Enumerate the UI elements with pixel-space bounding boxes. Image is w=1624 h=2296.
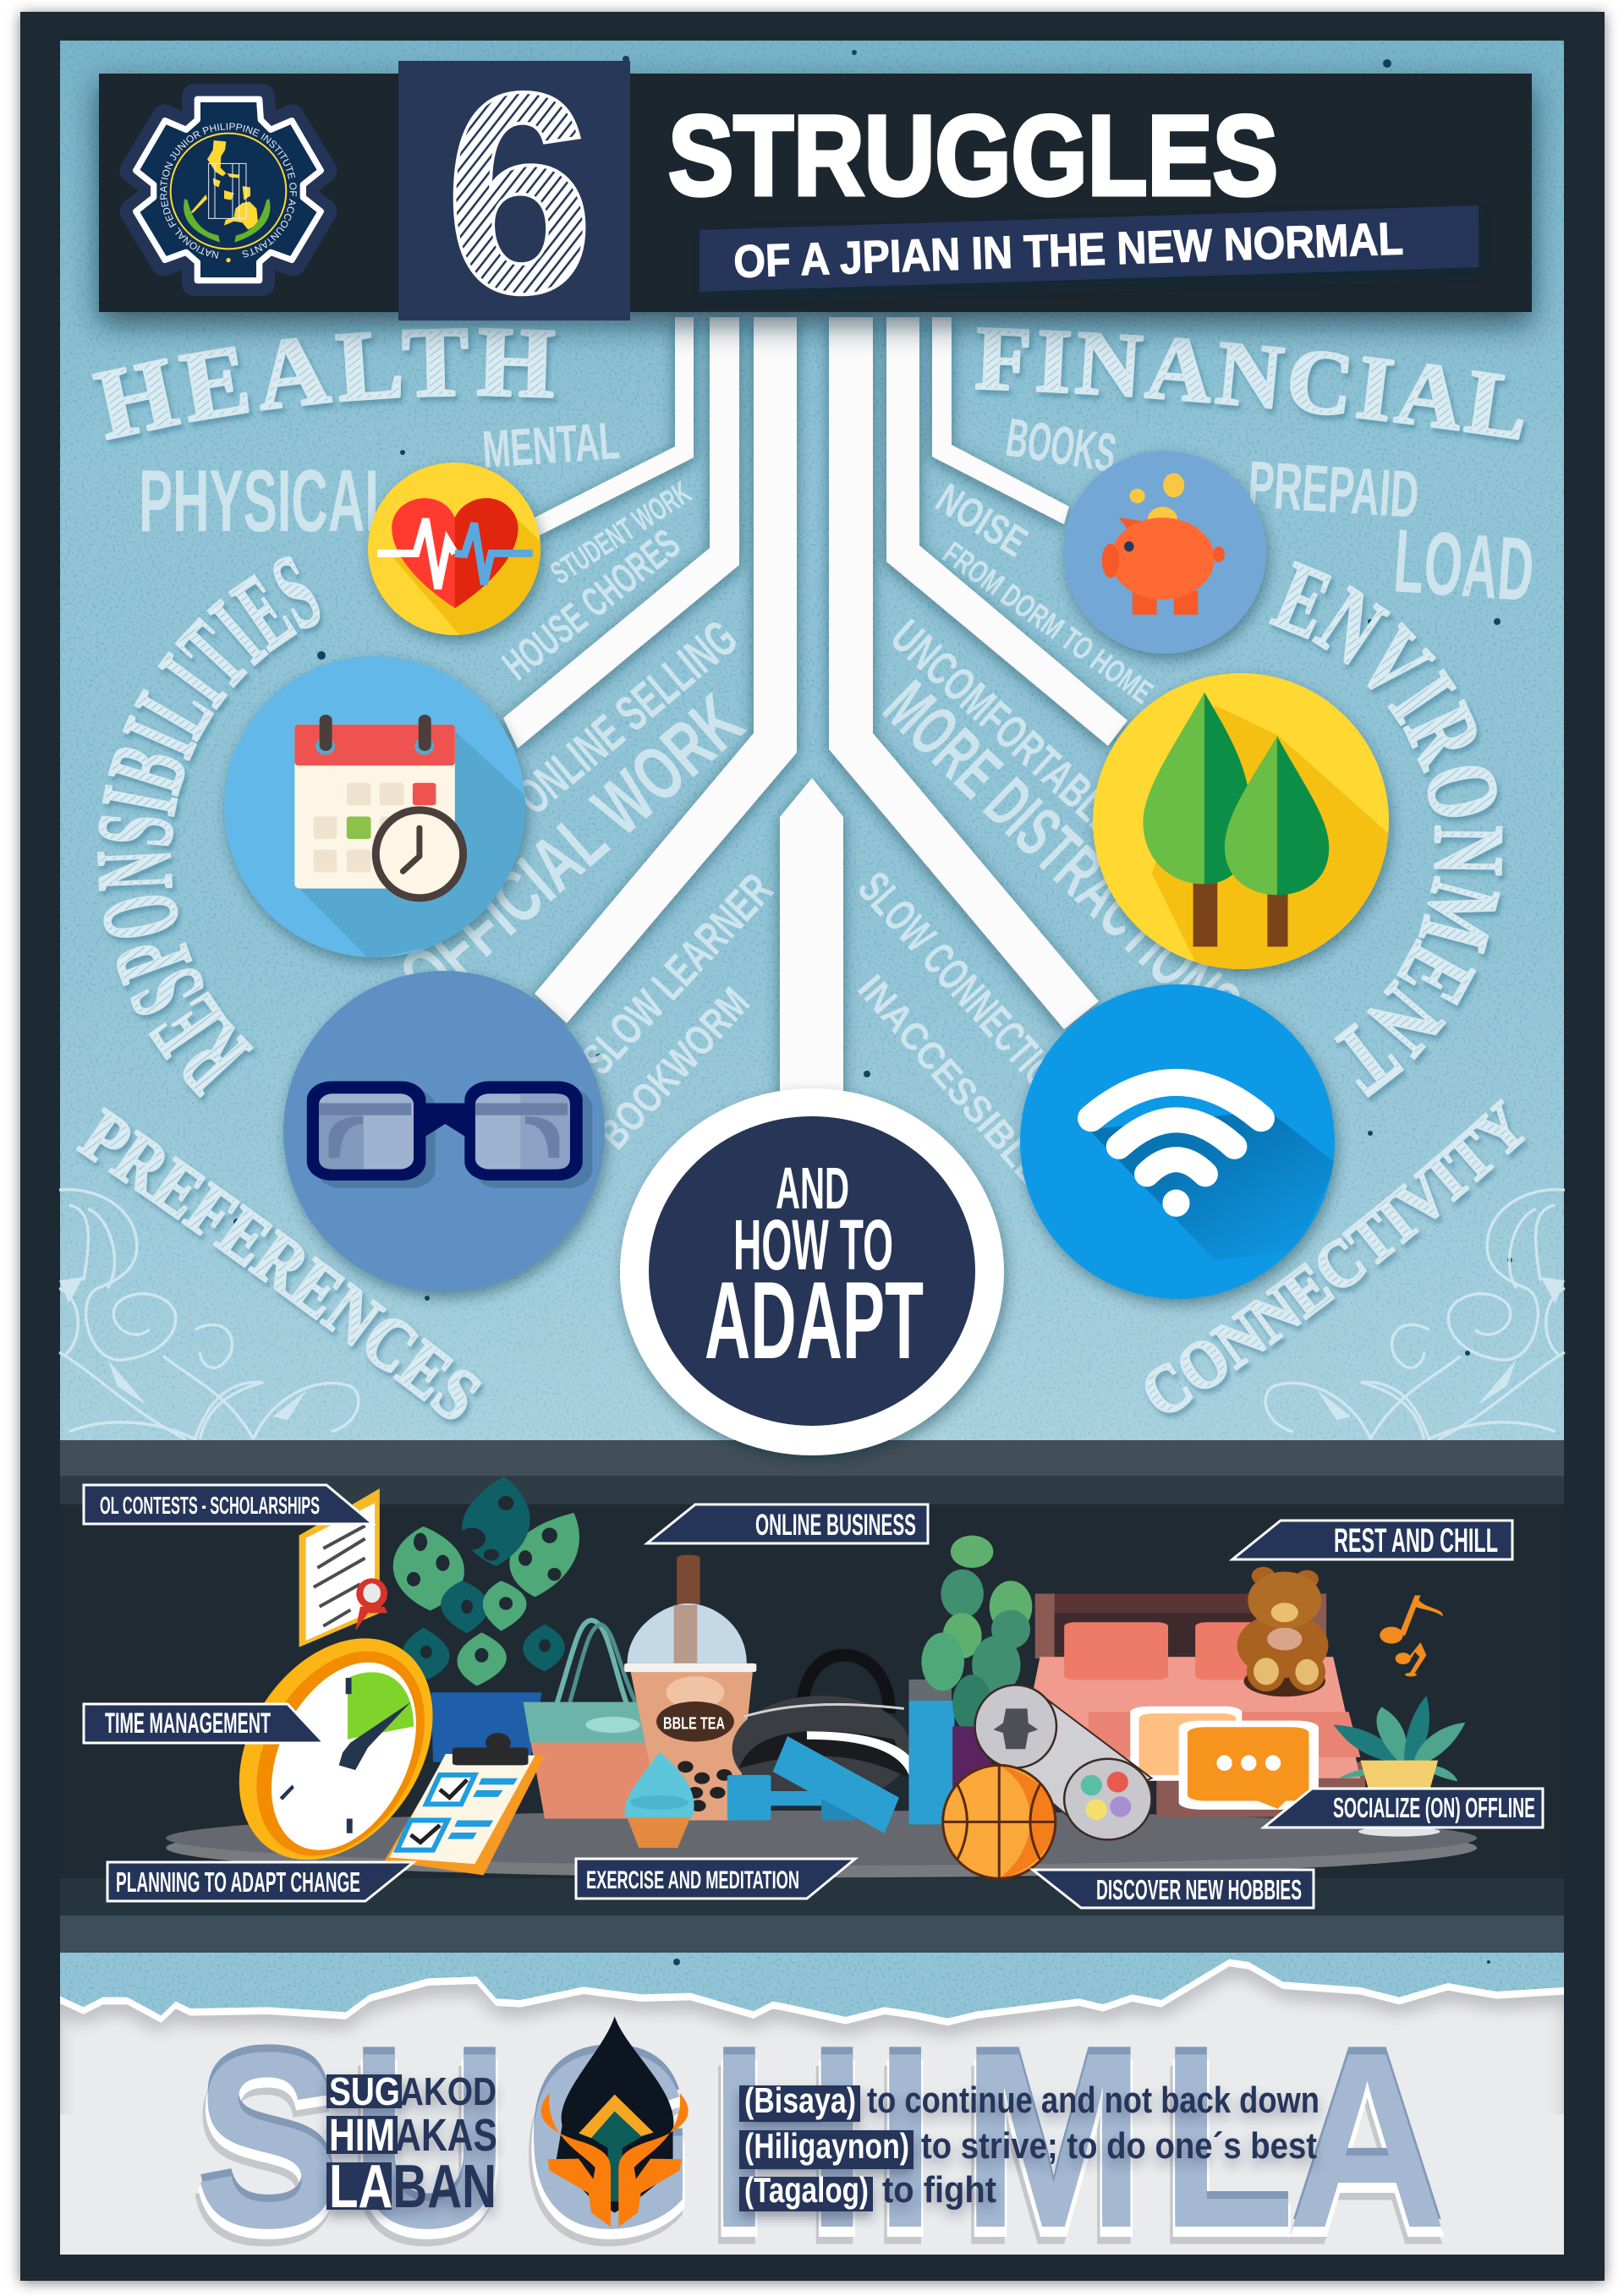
music notes [1380,1595,1443,1677]
word: MORE DISTRACTIONS: MORE DISTRACTIONS [869,666,1256,1044]
header banner [76,33,1555,353]
chat bubbles [1130,1707,1319,1810]
word: SLOW LEARNER: SLOW LEARNER [573,864,782,1084]
decorative swirls right [1265,1190,1565,1439]
line: Tagalog: (Tagalog) [744,2170,869,2210]
checklist clipboard [385,1733,545,1876]
big SUGHIMLA backdrop word: SUGHIMLA [195,1994,1447,2273]
word: INACCESSIBLE: INACCESSIBLE [849,966,1055,1193]
emblem: orange tribal mask [541,2016,689,2227]
title: STRUGGLES: STRUGGLES [668,93,1278,219]
teddy bear [1237,1567,1328,1696]
line: Tagalog: to fight [882,2169,996,2211]
dumbbell [727,1736,899,1833]
label: OL contests - scholarships: OL CONTESTS - SCHOLARSHIPS [100,1493,320,1520]
illustration: desk scene of coping activities [166,1477,1477,1878]
icon: trees circle [1093,673,1395,973]
alarm clock [215,1638,458,1860]
text: HOW TO: HOW TO [733,1205,893,1285]
word: SLOW CONNECTION: SLOW CONNECTION [848,863,1082,1113]
torn paper footer [59,1959,1564,2272]
label: online business: ONLINE BUSINESS [755,1509,916,1542]
second potted plant [921,1536,1032,1791]
word: HOUSE CHORES: HOUSE CHORES [494,520,689,689]
activity labels [84,1485,1543,1908]
icon: heart health circle [368,463,545,638]
word: PREFERENCES: PREFERENCES [76,1107,486,1426]
certificate [299,1488,387,1647]
word: PHYSICAL: PHYSICAL [139,452,396,551]
label: rest and chill: REST AND CHILL [1334,1522,1498,1559]
tote bag [524,1620,663,1819]
word: OFFICIAL WORK: OFFICIAL WORK [385,679,759,1020]
callout: and how to adapt circle [620,1088,1004,1455]
label: socialize (on) offline [1264,1789,1543,1827]
label: planning to adapt change: PLANNING TO ADAPT CHANGE [116,1866,360,1898]
big SUGHIMLA backdrop word: SUGHIMLA [195,2002,1447,2281]
word: ENVIRONMENT: ENVIRONMENT [1269,561,1507,1104]
word: HEALTH: HEALTH [91,328,560,447]
word: FINANCIAL: FINANCIAL [974,326,1528,447]
label: time management: TIME MANAGEMENT [105,1707,271,1740]
small potted plant [1333,1696,1465,1837]
word: MENTAL: MENTAL [480,412,622,479]
label: rest and chill [1232,1521,1512,1559]
big SUGHIMLA backdrop word: SUGHIMLA [195,2009,1447,2288]
gym bag [732,1655,911,1802]
line: Hiligaynon: to strive; to do one´s best [921,2125,1317,2167]
water bottle [908,1665,954,1824]
line: LABAN: LABAN [329,2153,497,2221]
word: FROM DORM TO HOME: FROM DORM TO HOME [936,535,1159,711]
text: ADAPT: ADAPT [705,1258,924,1382]
game controller [975,1685,1152,1839]
line: HIMAKAS: HIMAKAS [329,2110,497,2161]
logo: JPIA federation seal: NATIONAL FEDERATION JUNIOR PHILIPPINE INSTITUTE OF ACCOUNTANTS [160,123,297,259]
line: Bisaya [739,2080,1320,2122]
label: planning to adapt change [107,1862,414,1901]
line: Tagalog [739,2169,996,2211]
definitions of sughimla [739,2080,1320,2211]
word: ONLINE SELLING: ONLINE SELLING [505,609,748,825]
dark middle panel bands [60,1440,1564,1953]
label: exercise and meditation: EXERCISE AND MEDITATION [586,1866,799,1894]
basketball [943,1765,1056,1878]
word: NOISE: NOISE [928,474,1035,566]
label: discover new hobbies [1033,1870,1314,1908]
label: discover new hobbies: DISCOVER NEW HOBBIES [1096,1874,1302,1905]
word: RESPONSIBILITIES: RESPONSIBILITIES [97,556,325,1104]
word: STUDENT WORK: STUDENT WORK [545,475,698,592]
bubble tea cup [624,1555,756,1820]
icon: wifi circle [1020,984,1336,1299]
cupcake [624,1751,694,1848]
label: time management [84,1704,324,1743]
bubble tea cup: BBLE TEA [663,1715,725,1734]
subtitle ribbon: OF A JPIAN IN THE NEW NORMAL [732,213,1404,288]
numeral panel: 6 [398,33,630,353]
icon: calendar and clock circle [224,656,530,960]
monstera plant and blue pot [393,1477,579,1762]
white branch roads [503,317,1127,1116]
line: Bisaya: to continue and not back down [867,2080,1320,2121]
word cloud: struggle keywords [76,272,1537,1455]
text: AND: AND [776,1155,849,1221]
numeral panel: 6: 6 [445,33,594,353]
big SUGHIMLA backdrop word: SUGHIMLA [192,2016,1445,2295]
word: UNCOMFORTABLE: UNCOMFORTABLE [881,609,1133,846]
line: SUGAKOD: SUGAKOD [329,2069,497,2113]
label: OL contests - scholarships [84,1485,373,1524]
bed with pillows [1016,1594,1365,1817]
label: exercise and meditation [576,1859,855,1899]
logo: JPIA federation seal [120,84,337,296]
line: Bisaya: (Bisaya) [744,2080,856,2120]
icon: eyeglasses circle [283,971,605,1292]
floor platform [166,1811,1477,1877]
line: Hiligaynon: (Hiligaynon) [744,2126,909,2166]
icon: piggy bank circle [1063,451,1266,654]
label: online business [647,1504,928,1543]
word: BOOKWORM: BOOKWORM [590,978,759,1158]
line: Hiligaynon [739,2125,1317,2169]
word: BOOKS: BOOKS [1002,407,1120,484]
word: PREPAID: PREPAID [1246,447,1421,532]
acronym: SUGAKOD HIMAKAS LABAN [326,2069,497,2221]
word: CONNECTIVITY: CONNECTIVITY [1145,1099,1529,1420]
decorative swirls left [59,1190,359,1439]
